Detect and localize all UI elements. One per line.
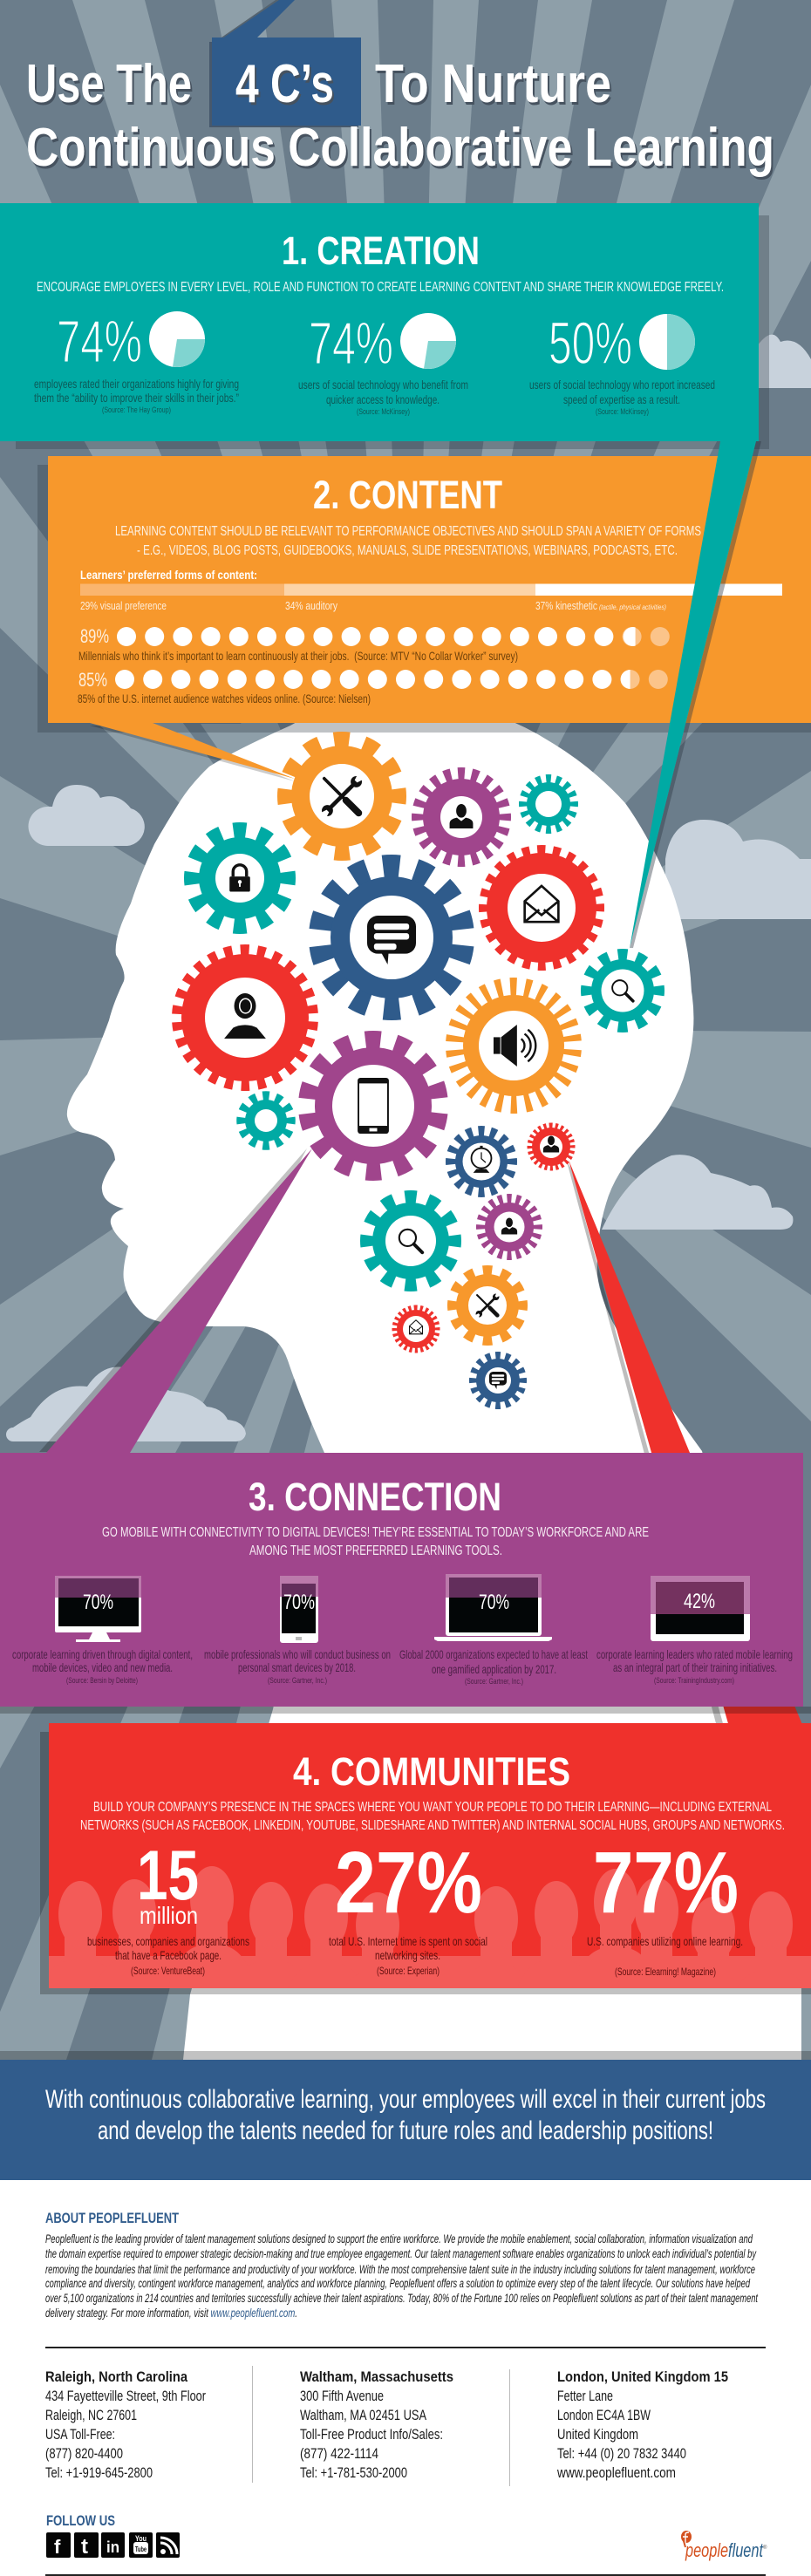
address: Raleigh [45,2368,206,2481]
gear: envelope lower [394,1308,438,1350]
stat: 77%: U.S. companies utilizing online learning. [587,1934,743,1948]
heading: content: 2. CONTENT [313,473,502,517]
stat: 74% skills [34,308,239,415]
device stat: monitor 70%: 70% [83,1591,113,1614]
title [26,54,774,178]
device stat: laptop 70%: one gamified application by 2017. [432,1662,556,1676]
stat: 27%: (Source: Experian) [377,1965,440,1977]
stat: 74% skills: 74% [57,308,142,375]
device stat: phone 70%: personal smart devices by 2018. [238,1660,356,1674]
address: Waltham: Waltham, MA 02451 USA [300,2407,426,2423]
device stat: laptop 70%: Global 2000 organizations expected to have at least [399,1647,588,1661]
about heading: ABOUT PEOPLEFLUENT [45,2210,179,2226]
gear: clock [451,1131,512,1192]
stat: 27%: 27% [335,1834,482,1932]
gear: chat [320,866,463,1009]
stat: 15 million [87,1837,249,1977]
address: London [556,2368,728,2481]
about paragraph [45,2232,759,2320]
address: Waltham: (877) 422-1114 [300,2445,378,2462]
address: London: London, United Kingdom 15 [557,2368,728,2385]
stat: 74% skills: employees rated their organizations highly for giving [34,377,239,391]
head silhouette [67,698,801,2060]
stat: 50% expertise [529,310,715,417]
stat: 74% knowledge: (Source: McKinsey) [357,407,410,417]
background rays [0,0,811,2060]
gear: person lower [481,1198,537,1256]
gear: chat lower [473,1355,523,1406]
social icons: in [106,2539,119,2556]
stat: 50% expertise: 50% [549,310,632,377]
stacked bar: preferred forms of content: 29% visual preference [80,599,167,612]
social icons: You [135,2534,147,2543]
device stat: phone 70% [204,1576,391,1686]
follow us heading: FOLLOW US [46,2512,115,2529]
stat: 15 million: businesses, companies and organizations [87,1934,249,1948]
gear: person [418,773,505,861]
address: Waltham [300,2368,453,2481]
section shadows [16,215,811,733]
address: Raleigh: Tel: +1-919-645-2800 [45,2464,153,2481]
heading: communities: 4. COMMUNITIES [293,1749,570,1794]
lower section shadows [0,1707,811,2060]
gear: webcam [177,950,313,1086]
stat: 27% [329,1834,487,1977]
social icons [46,2532,180,2559]
stat: 50% expertise: speed of expertise as a result. [563,392,680,406]
gear: tools lower [452,1270,523,1341]
gear: phone [307,1039,440,1172]
device stat: tablet 42% [596,1576,793,1686]
dot row: 85%: 85% [78,669,107,691]
panel: 1. creation [0,203,759,441]
stat: 15 million: that have a Facebook page. [115,1948,221,1962]
stat: 77%: (Source: Elearning! Magazine) [615,1966,716,1978]
stacked bar: preferred forms of content: Learners’ preferred forms of content: [80,568,257,582]
content intro text [115,524,701,558]
stat: 74% skills: them the “ability to improve their skills in their jobs.” [34,391,239,405]
clouds [6,335,811,1441]
address: Raleigh: Raleigh, North Carolina [45,2368,187,2385]
title: To Nurture [375,54,611,114]
panel: 3. connection [0,1453,803,1707]
stat: 15 million: million [140,1902,198,1929]
panel: 2. content [48,456,811,723]
device stat: laptop 70%: (Source: Gartner, Inc.) [465,1677,523,1687]
dot row: 85% [78,669,668,705]
crowd silhouette [33,1866,811,2036]
social icons: t [81,2535,88,2559]
device stat: laptop 70%: 70% [479,1591,509,1614]
stacked bar: preferred forms of content: 34% auditory [285,599,337,612]
address: London: www.peoplefluent.com [556,2464,676,2481]
device stat: monitor 70%: mobile devices, video and new media. [32,1660,173,1674]
communities intro text [80,1800,785,1833]
stat: 74% knowledge [298,310,468,417]
gear: speaker [455,987,572,1104]
connection intro text [102,1525,649,1558]
gear: small teal [523,779,574,829]
social icons: Tube [135,2545,147,2553]
device stat: phone 70%: (Source: Gartner, Inc.) [268,1676,327,1686]
device stat: tablet 42%: (Source: TrainingIndustry.com) [654,1676,734,1686]
purple callout beam [39,1148,312,1453]
about paragraph: delivery strategy. For more information, visit www.peoplefluent.com. [45,2307,297,2320]
gear: search lower [366,1196,455,1285]
stat: 50% expertise: users of social technology who report increased [529,378,715,392]
teal callout beam [630,441,761,948]
stat: 74% knowledge: 74% [309,310,393,377]
device stat: laptop 70% [399,1574,588,1687]
device stat: monitor 70%: corporate learning driven through digital content, [12,1647,193,1661]
address: Waltham: Toll-Free Product Info/Sales: [300,2426,443,2443]
gear: small teal lower [241,1095,291,1146]
stat: 27%: networking sites. [375,1948,440,1962]
gear: envelope [483,849,600,966]
gear: search [586,954,659,1027]
stat: 74% skills: (Source: The Hay Group) [102,405,171,415]
address: London: United Kingdom [557,2426,638,2443]
dot row: 85%: 85% of the U.S. internet audience watches videos online. (Source: Nielsen) [78,692,371,705]
address: London: London EC4A 1BW [557,2407,651,2423]
title: 4 C’s [235,54,334,114]
stat: 27%: total U.S. Internet time is spent on social [329,1934,487,1948]
stat: 74% knowledge: users of social technology who benefit from [298,378,468,392]
address: Raleigh: Raleigh, NC 27601 [45,2407,137,2423]
address: Raleigh: 434 Fayetteville Street, 9th Floor [45,2388,206,2404]
device stat: monitor 70% [12,1576,193,1686]
dot row: 89%: 89% [80,625,109,647]
red callout beam [567,1160,803,1727]
device stat: phone 70%: mobile professionals who will conduct business on [204,1647,391,1661]
heading: creation: 1. CREATION [282,228,480,273]
title: Use The [26,54,192,114]
address: Waltham: Tel: +1-781-530-2000 [300,2464,407,2481]
stacked bar: preferred forms of content [80,568,782,612]
device stat: phone 70%: 70% [283,1591,315,1614]
social icons: f [54,2536,61,2558]
stacked bar: preferred forms of content: 37% kinesthetic [535,599,597,612]
stat: 77% [587,1834,743,1978]
address: Raleigh: USA Toll-Free: [45,2426,115,2443]
stat: 74% knowledge: quicker access to knowledge. [326,392,440,406]
orange callout beam [90,723,295,781]
address: London: Tel: +44 (0) 20 7832 3440 [557,2445,686,2462]
dot row: 89%: Millennials who think it’s important to learn continuously at their jobs. (Source: MTV “No Collar Worker” survey) [78,649,518,663]
address: London: Fetter Lane [557,2388,613,2404]
rules and column dividers [45,2347,766,2576]
peoplefluent logo [681,2531,767,2561]
device stat: monitor 70%: (Source: Bersin by Deloitte) [66,1676,138,1686]
gear: tools [284,739,399,853]
gear: small red person [530,1125,572,1169]
stat: 15 million: (Source: VentureBeat) [131,1965,205,1977]
address: Waltham: 300 Fifth Avenue [300,2388,384,2404]
gear: lock [192,830,288,926]
peoplefluent logo: peoplefluent [685,2539,764,2561]
stat: 15 million: 15 [137,1837,199,1915]
stacked bar: preferred forms of content: (tactile, physical activities) [599,603,666,611]
panel: 4. communities [49,1723,811,1988]
stat: 77%: 77% [593,1834,739,1932]
address: Waltham: Waltham, Massachusetts [300,2368,453,2385]
title badge: 4 C's speech box [209,0,361,127]
connection intro text: AMONG THE MOST PREFERRED LEARNING TOOLS. [249,1544,502,1558]
stat: 50% expertise: (Source: McKinsey) [596,407,649,417]
address: Raleigh: (877) 820-4400 [45,2445,123,2462]
closing banner [0,2060,811,2180]
device stat: tablet 42%: 42% [684,1590,715,1613]
heading: connection: 3. CONNECTION [249,1475,501,1519]
peoplefluent logo: ® [763,2545,767,2551]
dot row: 89% [78,625,670,663]
